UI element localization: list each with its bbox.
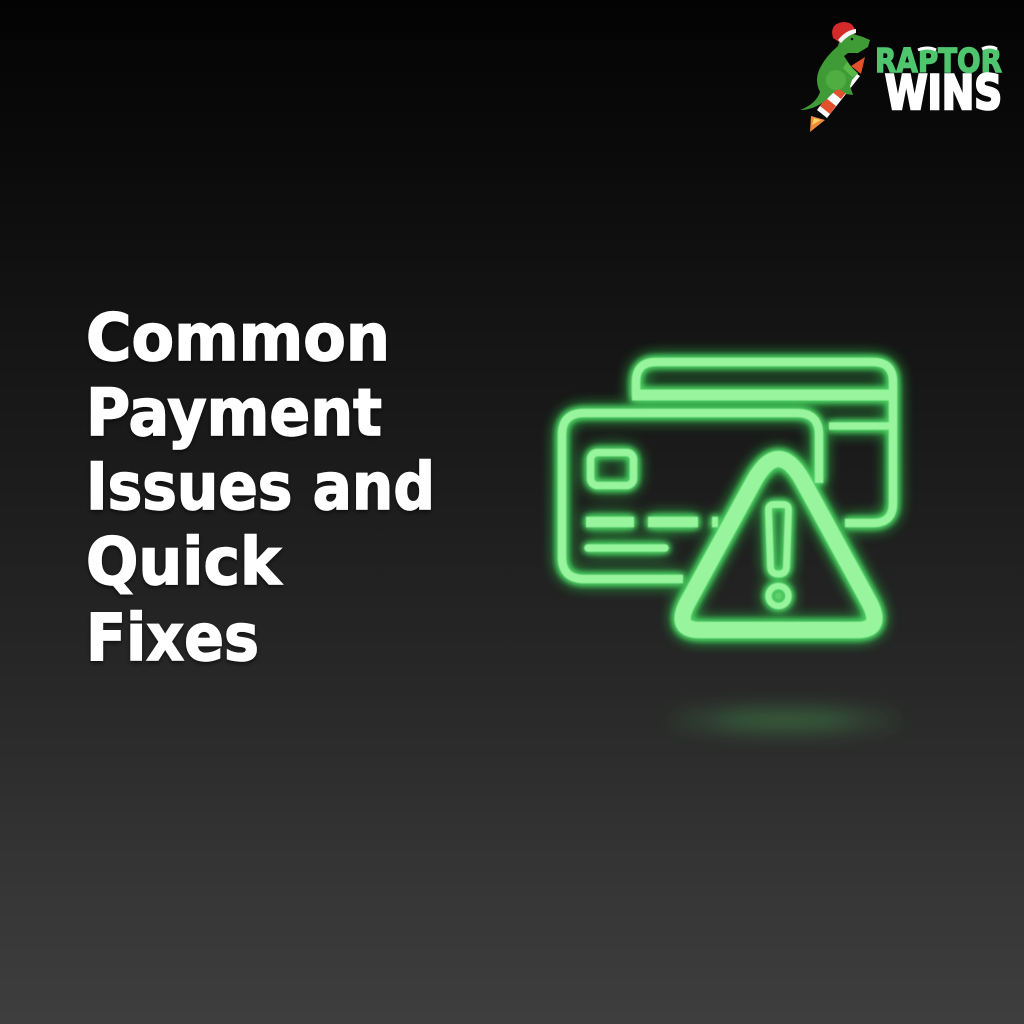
front credit card: [562, 413, 819, 579]
logo: Raptor Wins: [800, 22, 1002, 132]
title: Fixes: [86, 601, 259, 676]
title: Quick: [86, 525, 283, 600]
card number dashes: [586, 517, 718, 527]
title: [86, 301, 435, 676]
rocket: [810, 57, 865, 132]
logo wordmark: WINS: [885, 66, 1002, 121]
title: Common: [86, 301, 390, 376]
card name line: [588, 544, 665, 552]
card chip: [590, 452, 634, 486]
logo wordmark: [875, 41, 1002, 121]
logo wordmark: RAPTOR: [875, 41, 1002, 80]
warning triangle: [683, 459, 874, 630]
santa hat: [832, 22, 856, 43]
title: Issues and: [86, 450, 435, 525]
back credit card: [632, 362, 893, 523]
dinosaur: [800, 32, 870, 110]
title: Payment: [86, 376, 382, 451]
exclamation mark: [768, 504, 788, 606]
icon: floor reflection glow: [670, 711, 900, 729]
icon: neon credit cards with warning triangle: [562, 362, 893, 630]
